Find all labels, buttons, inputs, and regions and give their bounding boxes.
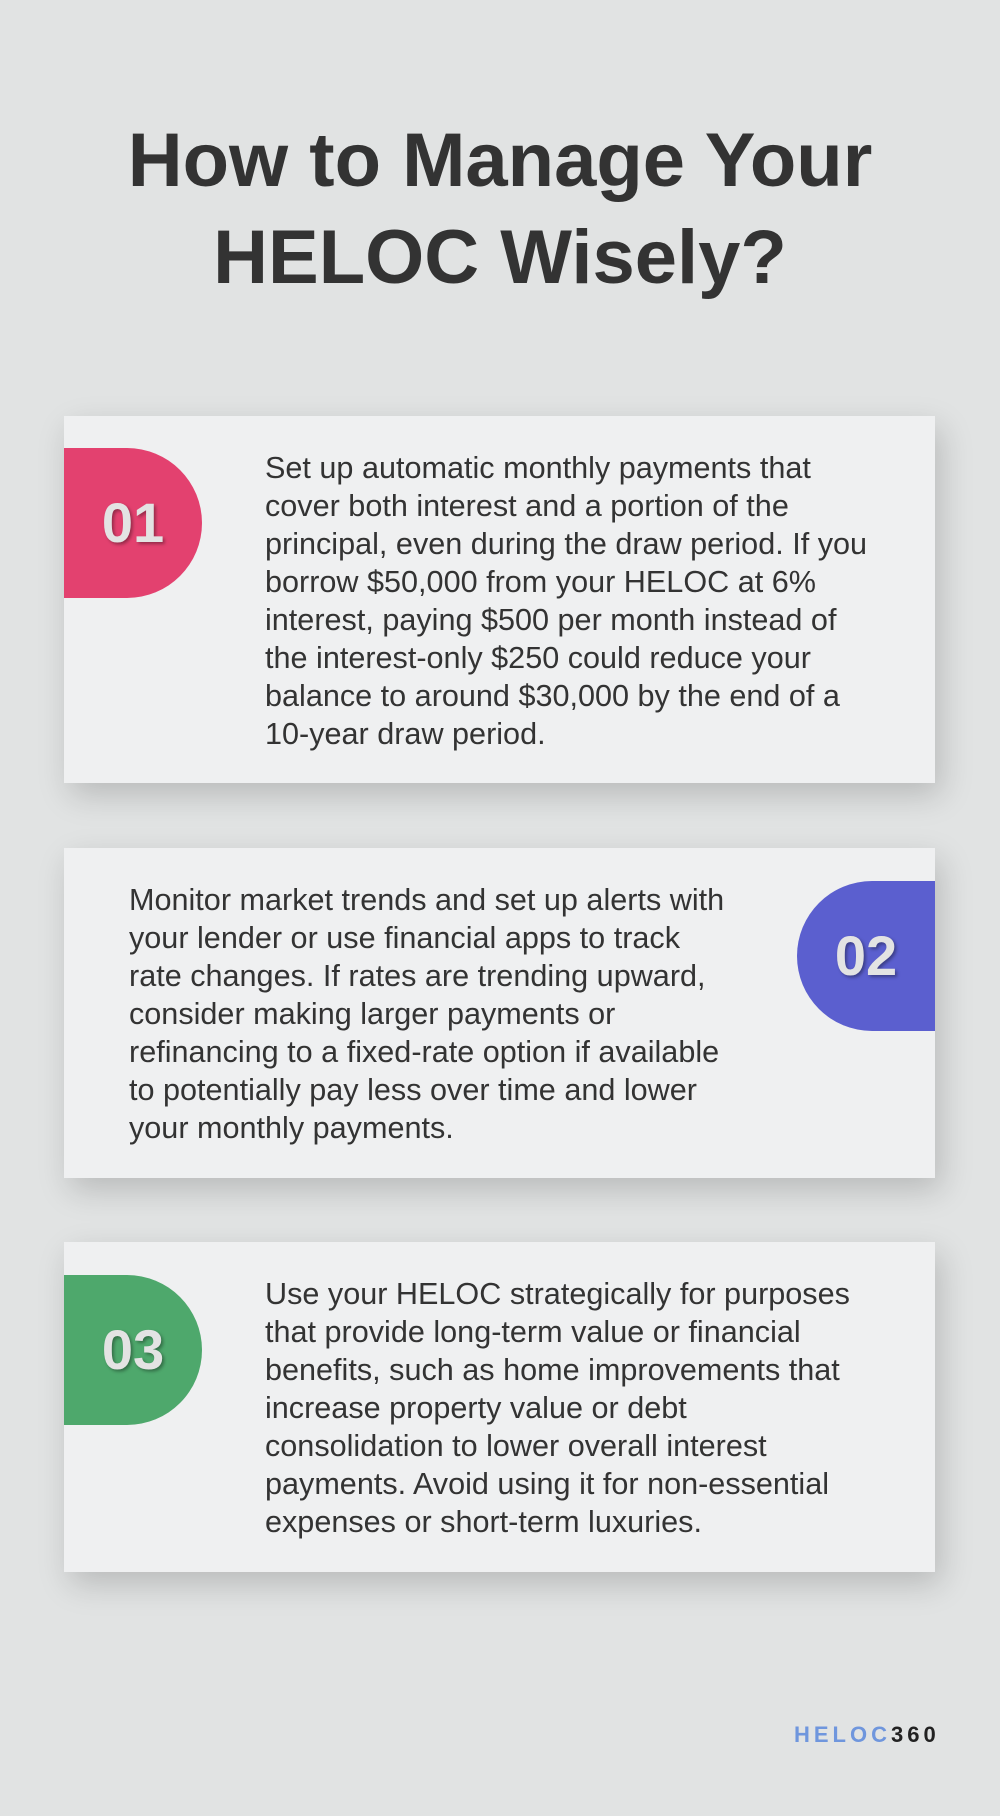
badge 03: [64, 1275, 202, 1425]
panel: step 1: [64, 416, 935, 783]
logo: HELOC360: [794, 1722, 940, 1747]
text 2: [129, 883, 724, 1145]
text 3: expenses or short-term luxuries.: [265, 1505, 702, 1539]
text 3: that provide long-term value or financial: [265, 1315, 801, 1349]
text 1: interest, paying $500 per month instead of: [265, 603, 836, 637]
text 2: your monthly payments.: [129, 1111, 454, 1145]
title: HELOC Wisely?: [213, 215, 787, 300]
text 1: borrow $50,000 from your HELOC at 6%: [265, 565, 816, 599]
text 1: Set up automatic monthly payments that: [265, 451, 811, 485]
badge 01: 01: [102, 491, 164, 554]
text 3: [265, 1277, 850, 1539]
text 2: refinancing to a fixed-rate option if available: [129, 1035, 719, 1069]
text 3: consolidation to lower overall interest: [265, 1429, 767, 1463]
text 3: Use your HELOC strategically for purposes: [265, 1277, 850, 1311]
text 1: cover both interest and a portion of the: [265, 489, 789, 523]
text 2: Monitor market trends and set up alerts with: [129, 883, 724, 917]
panel: step 3: [64, 1242, 935, 1572]
panel: step 2: [64, 848, 935, 1178]
badge 02: [797, 881, 935, 1031]
badge 01: [64, 448, 202, 598]
badge 02: 02: [835, 924, 897, 987]
title: [128, 118, 872, 300]
text 3: increase property value or debt: [265, 1391, 687, 1425]
badge 03: 03: [102, 1318, 164, 1381]
text 1: balance to around $30,000 by the end of a: [265, 679, 840, 713]
text 1: principal, even during the draw period. If you: [265, 527, 867, 561]
text 1: [265, 451, 867, 751]
text 1: 10-year draw period.: [265, 717, 546, 751]
text 1: the interest-only $250 could reduce your: [265, 641, 811, 675]
title: How to Manage Your: [128, 118, 872, 203]
text 3: payments. Avoid using it for non-essential: [265, 1467, 829, 1501]
text 3: benefits, such as home improvements that: [265, 1353, 840, 1387]
text 2: to potentially pay less over time and lower: [129, 1073, 697, 1107]
text 2: rate changes. If rates are trending upward,: [129, 959, 706, 993]
text 2: consider making larger payments or: [129, 997, 615, 1031]
text 2: your lender or use financial apps to track: [129, 921, 680, 955]
